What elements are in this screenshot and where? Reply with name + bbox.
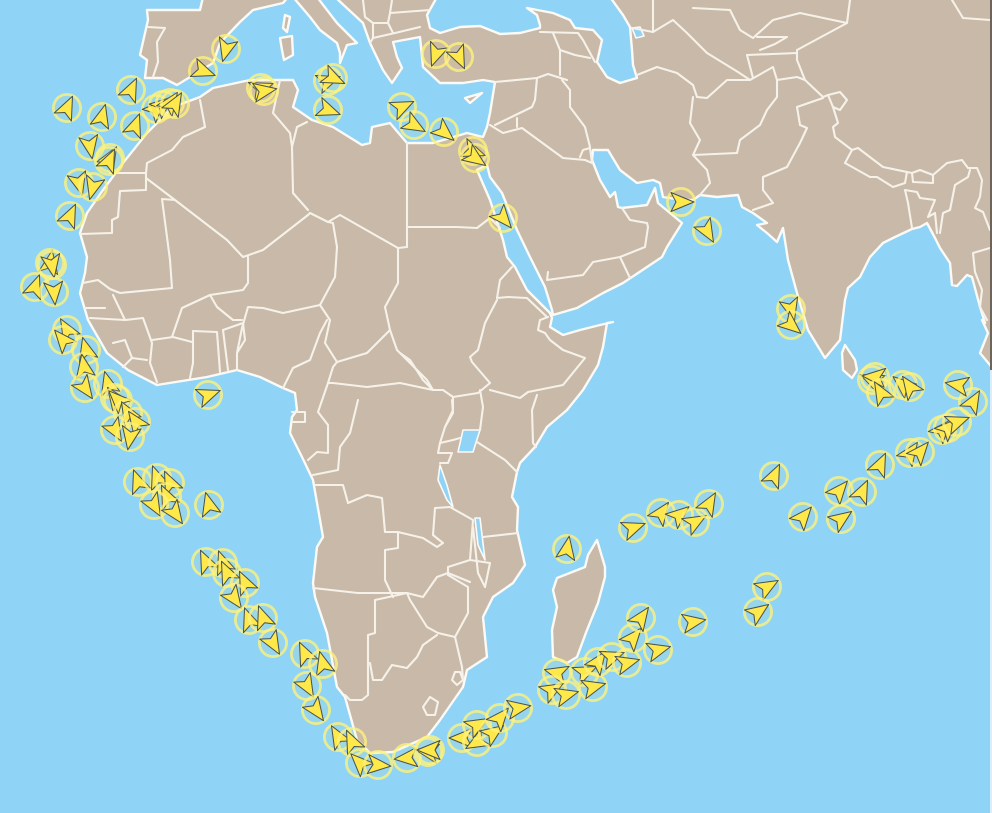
- lakes: [438, 27, 644, 560]
- island: Sardinia: [280, 36, 293, 60]
- markers: central Indian Ocean: [616, 458, 880, 631]
- right edge strip: [990, 0, 992, 813]
- island: Cyprus: [465, 93, 482, 103]
- island: Corsica: [283, 15, 290, 32]
- markers: West Africa coast: [18, 247, 225, 453]
- markers: south of Sri Lanka to the east: [854, 362, 992, 483]
- island: Madagascar: [552, 540, 605, 663]
- markers: Arabian Sea and India: [667, 188, 810, 344]
- markers: Southwest Africa coast: [188, 544, 340, 729]
- island: Sri Lanka: [842, 345, 857, 378]
- markers: Mediterranean: [186, 32, 522, 237]
- markers: South Africa coast: [319, 692, 534, 782]
- markers: Morocco and Western Sahara coast: [49, 72, 194, 234]
- land: Iberia and France: [140, 0, 288, 85]
- land: Italy: [293, 0, 357, 63]
- markers: south of Madagascar: [533, 533, 709, 712]
- markers: Gulf of Guinea offshore: [121, 461, 226, 532]
